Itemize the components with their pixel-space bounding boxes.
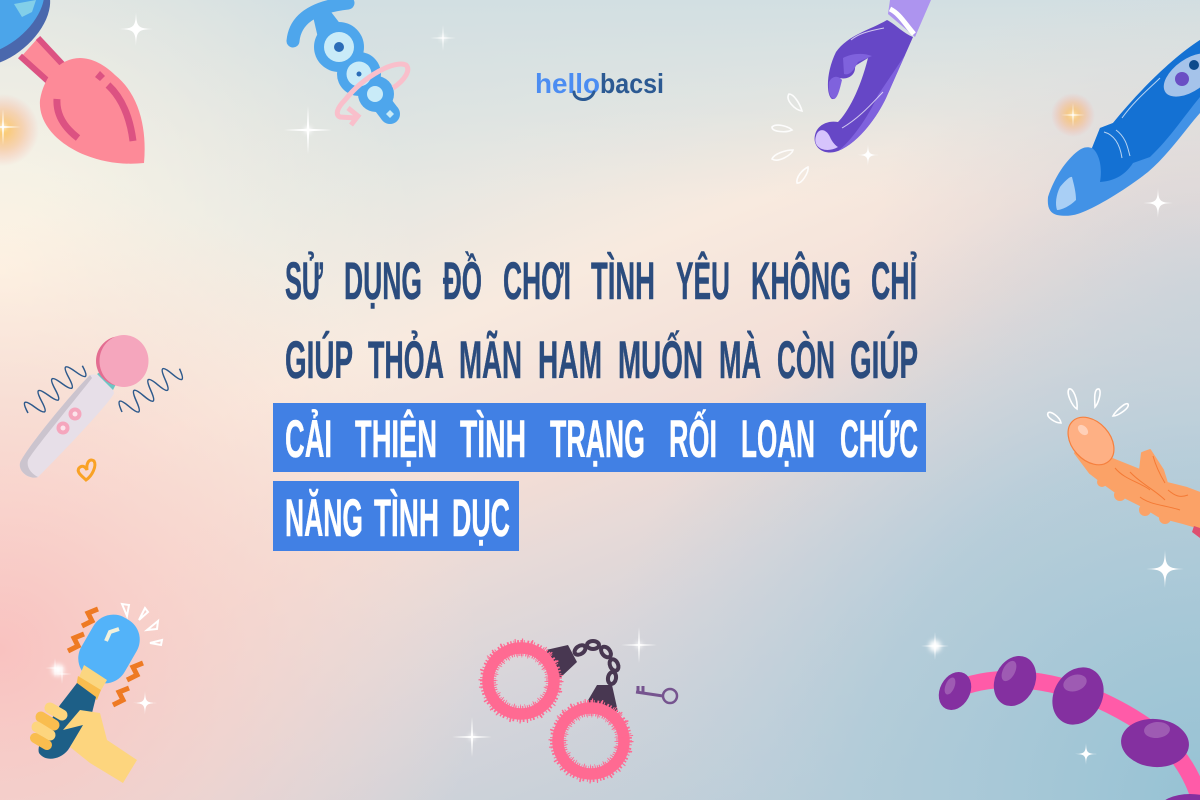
heading line 1: KHÔNG [751,250,851,311]
highlighted heading line 3: RỐI [669,409,717,469]
heading line 2: HAM [538,331,602,390]
logo: hellobacsi [535,68,664,100]
logo: hellobacsi: bacsi [600,68,664,99]
heading line 2: MUỐN [618,330,703,390]
heading line 2: GIÚP [850,330,918,390]
heading line 2: THỎA [368,330,444,390]
highlighted heading line 3: LOẠN [741,410,815,469]
icon: blue toy [1048,40,1200,216]
highlighted heading line 4: DỤC [452,489,510,548]
icon: orange toy [1048,389,1200,538]
highlighted heading line 3: TÌNH [460,409,526,469]
icon: blue beads with pink ring [293,3,408,125]
icon: fuzzy handcuffs and key [488,641,677,774]
highlighted heading line 3: THIỆN [355,408,437,469]
icon: pink plug with blue gem [0,0,145,166]
icon: hand holding wand [35,604,162,783]
highlighted heading line 4 [273,481,519,551]
logo: hellobacsi: hello [535,68,600,99]
heading line 1: YÊU [676,250,730,311]
heading line 1 [285,250,917,311]
heading line 1: SỬ [285,251,323,311]
heading line 2 [285,330,918,390]
icon: purple rabbit toy [772,0,931,183]
heading line 2: MÃN [459,330,522,390]
highlighted heading line 3: TRẠNG [550,410,645,469]
heading line 1: TÌNH [591,251,655,311]
highlighted heading line 3: CHỨC [840,409,918,469]
highlighted heading line 3 [273,403,926,472]
highlighted heading line 3: CẢI [285,409,332,469]
heading line 1: CHƠI [503,252,571,311]
icon: massage wand [20,335,186,480]
heading line 1: DỤNG [344,252,422,311]
icon: purple bead chain [932,649,1200,800]
heading line 2: CÒN [777,330,835,390]
heading line 1: CHỈ [871,251,917,311]
heading line 1: ĐỒ [443,251,482,311]
heading line 2: MÀ [719,330,761,390]
highlighted heading line 4: NĂNG [285,488,363,548]
heading line 2: GIÚP [285,330,353,390]
highlighted heading line 4: TÌNH [374,488,439,548]
